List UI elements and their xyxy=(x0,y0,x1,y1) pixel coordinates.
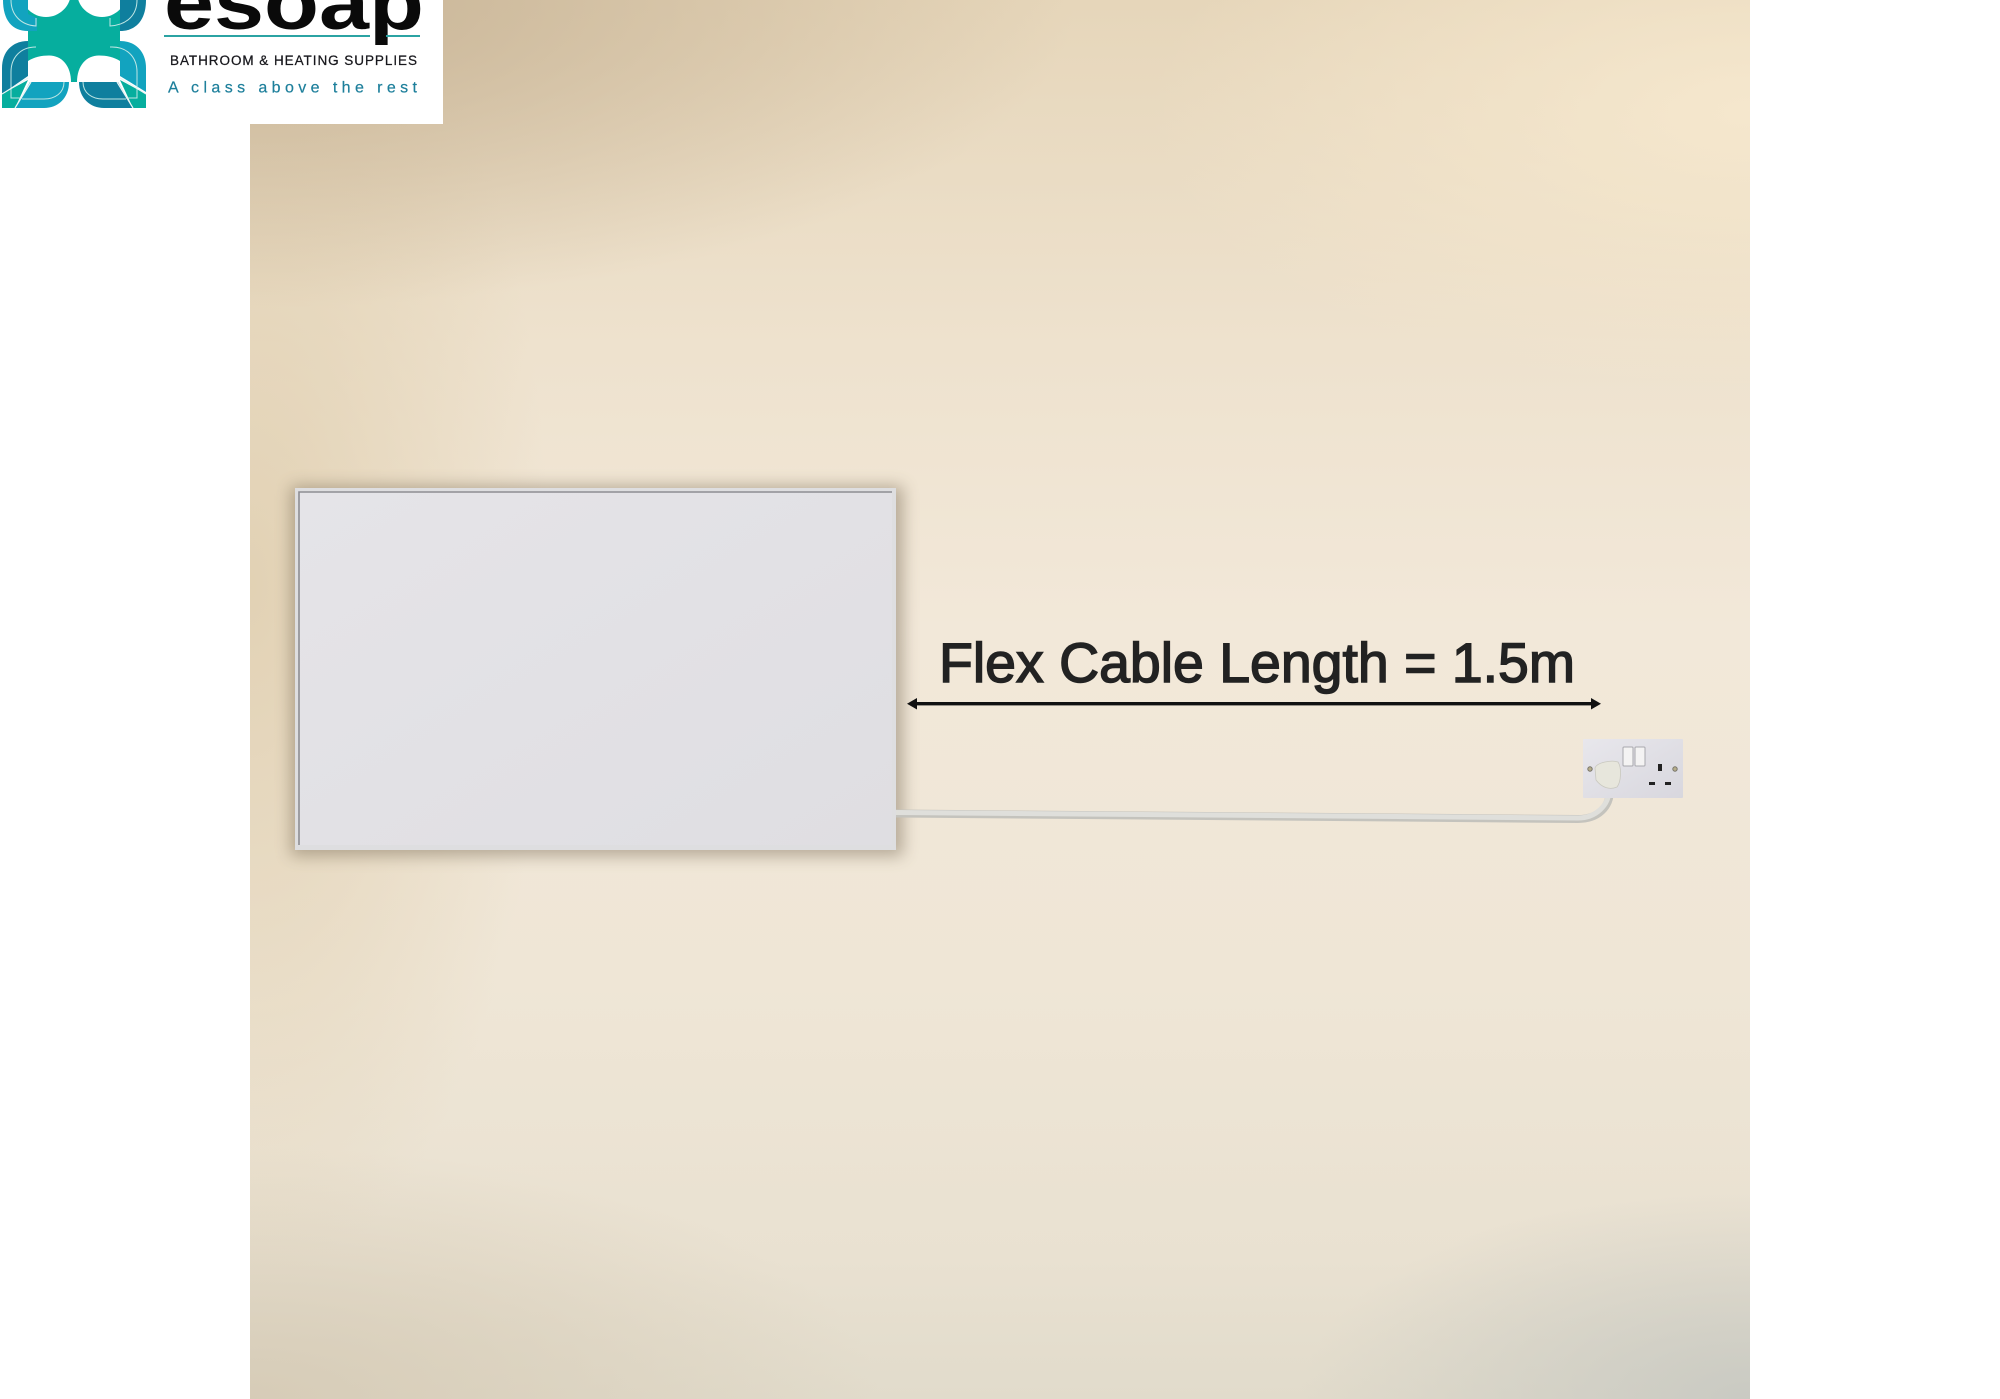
background wall xyxy=(250,0,1750,1399)
screws xyxy=(1588,767,1677,771)
wall socket xyxy=(1583,739,1683,798)
logo tagline: A class above the rest xyxy=(168,80,418,96)
plug xyxy=(1595,761,1621,788)
socket holes xyxy=(1649,764,1671,785)
label: flex cable length: Flex Cable Length = 1.5m xyxy=(939,631,1575,694)
heater panel xyxy=(291,486,903,856)
logo strapline: BATHROOM & HEATING SUPPLIES xyxy=(170,53,417,68)
switches xyxy=(1623,747,1645,766)
logo icon xyxy=(2,0,146,108)
flex cable xyxy=(896,790,1610,819)
logo xyxy=(0,0,443,124)
double-headed arrow xyxy=(907,698,1601,710)
logo underline xyxy=(164,35,420,37)
